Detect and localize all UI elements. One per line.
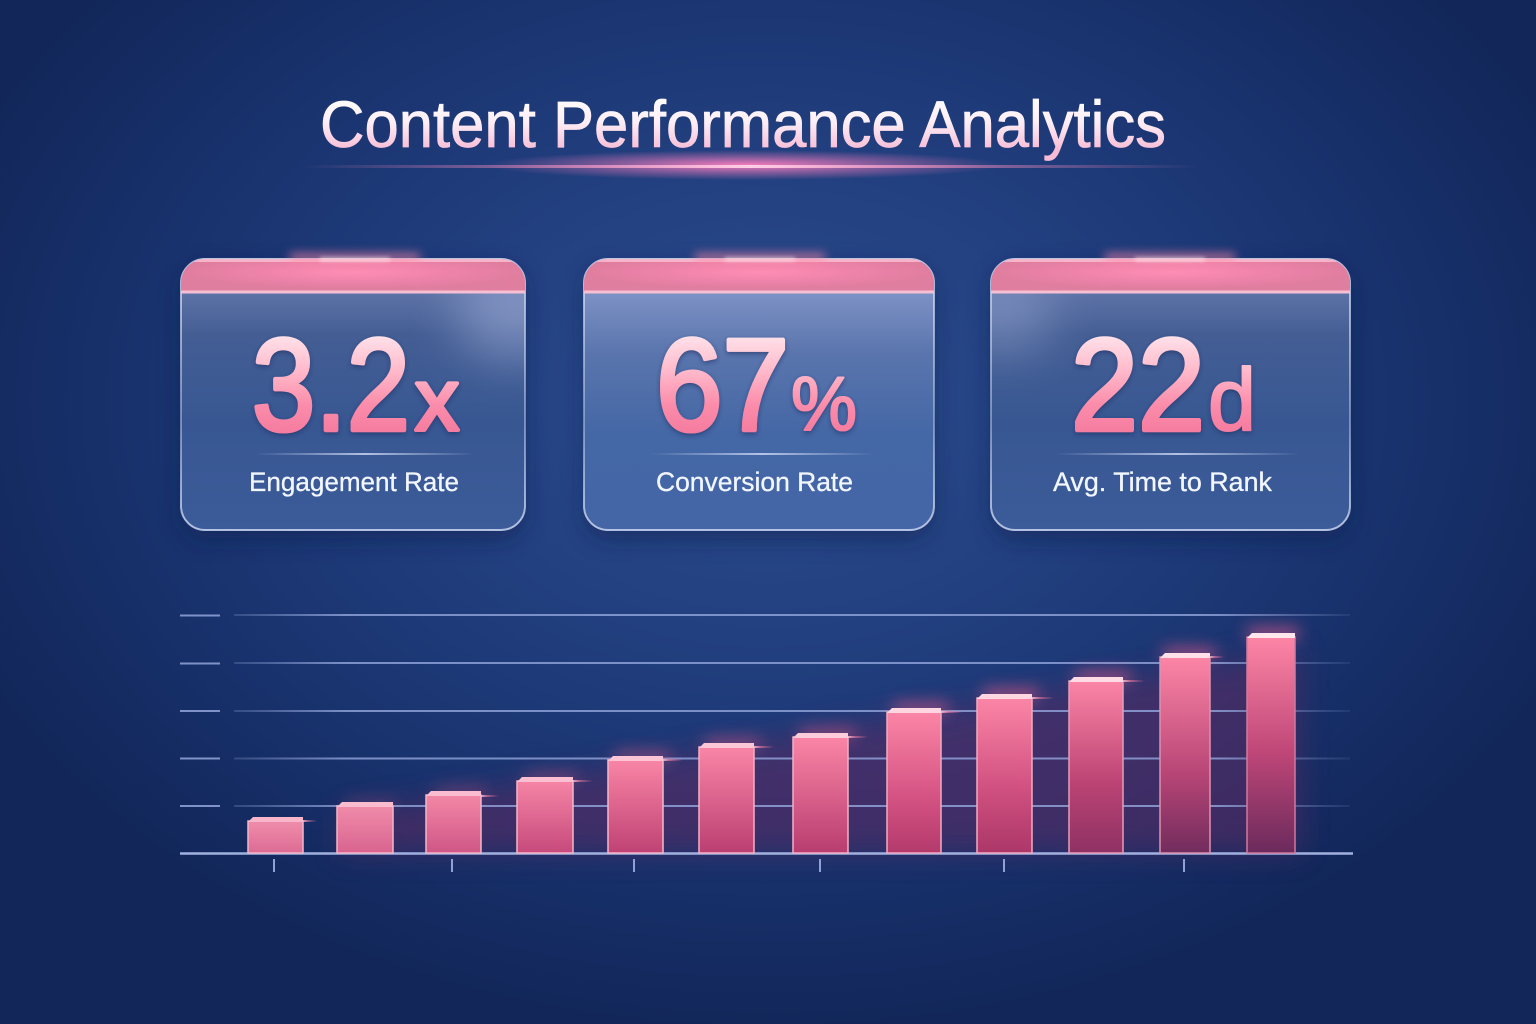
x axis <box>180 852 1353 855</box>
metric label: engagement rate: Engagement Rate <box>249 467 459 497</box>
card header: avg time to rank <box>991 259 1350 292</box>
panel: engagement rate <box>181 254 575 538</box>
title underline glow <box>300 150 1200 180</box>
bar 5 <box>608 756 663 853</box>
bar 4 <box>517 777 573 853</box>
bar 9 <box>977 694 1032 853</box>
metric label: avg time to rank: Avg. Time to Rank <box>1053 467 1272 497</box>
bar chart <box>180 615 1353 872</box>
metric value: 3.2x: 3.2 <box>252 311 410 458</box>
metric value: 22d: d <box>1208 350 1256 449</box>
bar 2 <box>337 802 393 853</box>
bar 12 <box>1247 633 1295 853</box>
y axis dashes <box>180 616 220 806</box>
corner sheen: avg time to rank <box>992 294 1064 370</box>
bar 10 <box>1069 677 1123 853</box>
chart grid lines <box>234 615 1350 806</box>
metric value: 67%: % <box>791 362 857 447</box>
metric value: 3.2x: x <box>415 350 459 449</box>
title: Content Performance Analytics <box>320 87 1166 161</box>
header glow: avg time to rank <box>1105 254 1235 261</box>
card header: conversion rate <box>584 259 934 292</box>
corner sheen: engagement rate <box>440 294 524 380</box>
metric value: 22d: 22 <box>1071 311 1205 458</box>
metric label: conversion rate: Conversion Rate <box>656 467 853 497</box>
bar 11 <box>1160 653 1210 853</box>
header glow: engagement rate <box>290 254 420 261</box>
bar 6 <box>699 743 754 853</box>
card header: engagement rate <box>181 259 525 292</box>
bar 8 <box>887 708 941 853</box>
bar 1 <box>248 817 303 853</box>
x axis ticks <box>274 859 1184 872</box>
bar glows <box>345 629 1299 806</box>
panel: avg time to rank <box>945 254 1350 538</box>
header glow: conversion rate <box>695 254 825 261</box>
metric value: 67%: 67 <box>656 311 789 458</box>
panel: conversion rate <box>584 254 934 538</box>
plot shading behind bars <box>340 650 1300 853</box>
bar 3 <box>426 791 481 853</box>
bar cap light streaks <box>303 656 1224 822</box>
bar 7 <box>793 733 848 853</box>
